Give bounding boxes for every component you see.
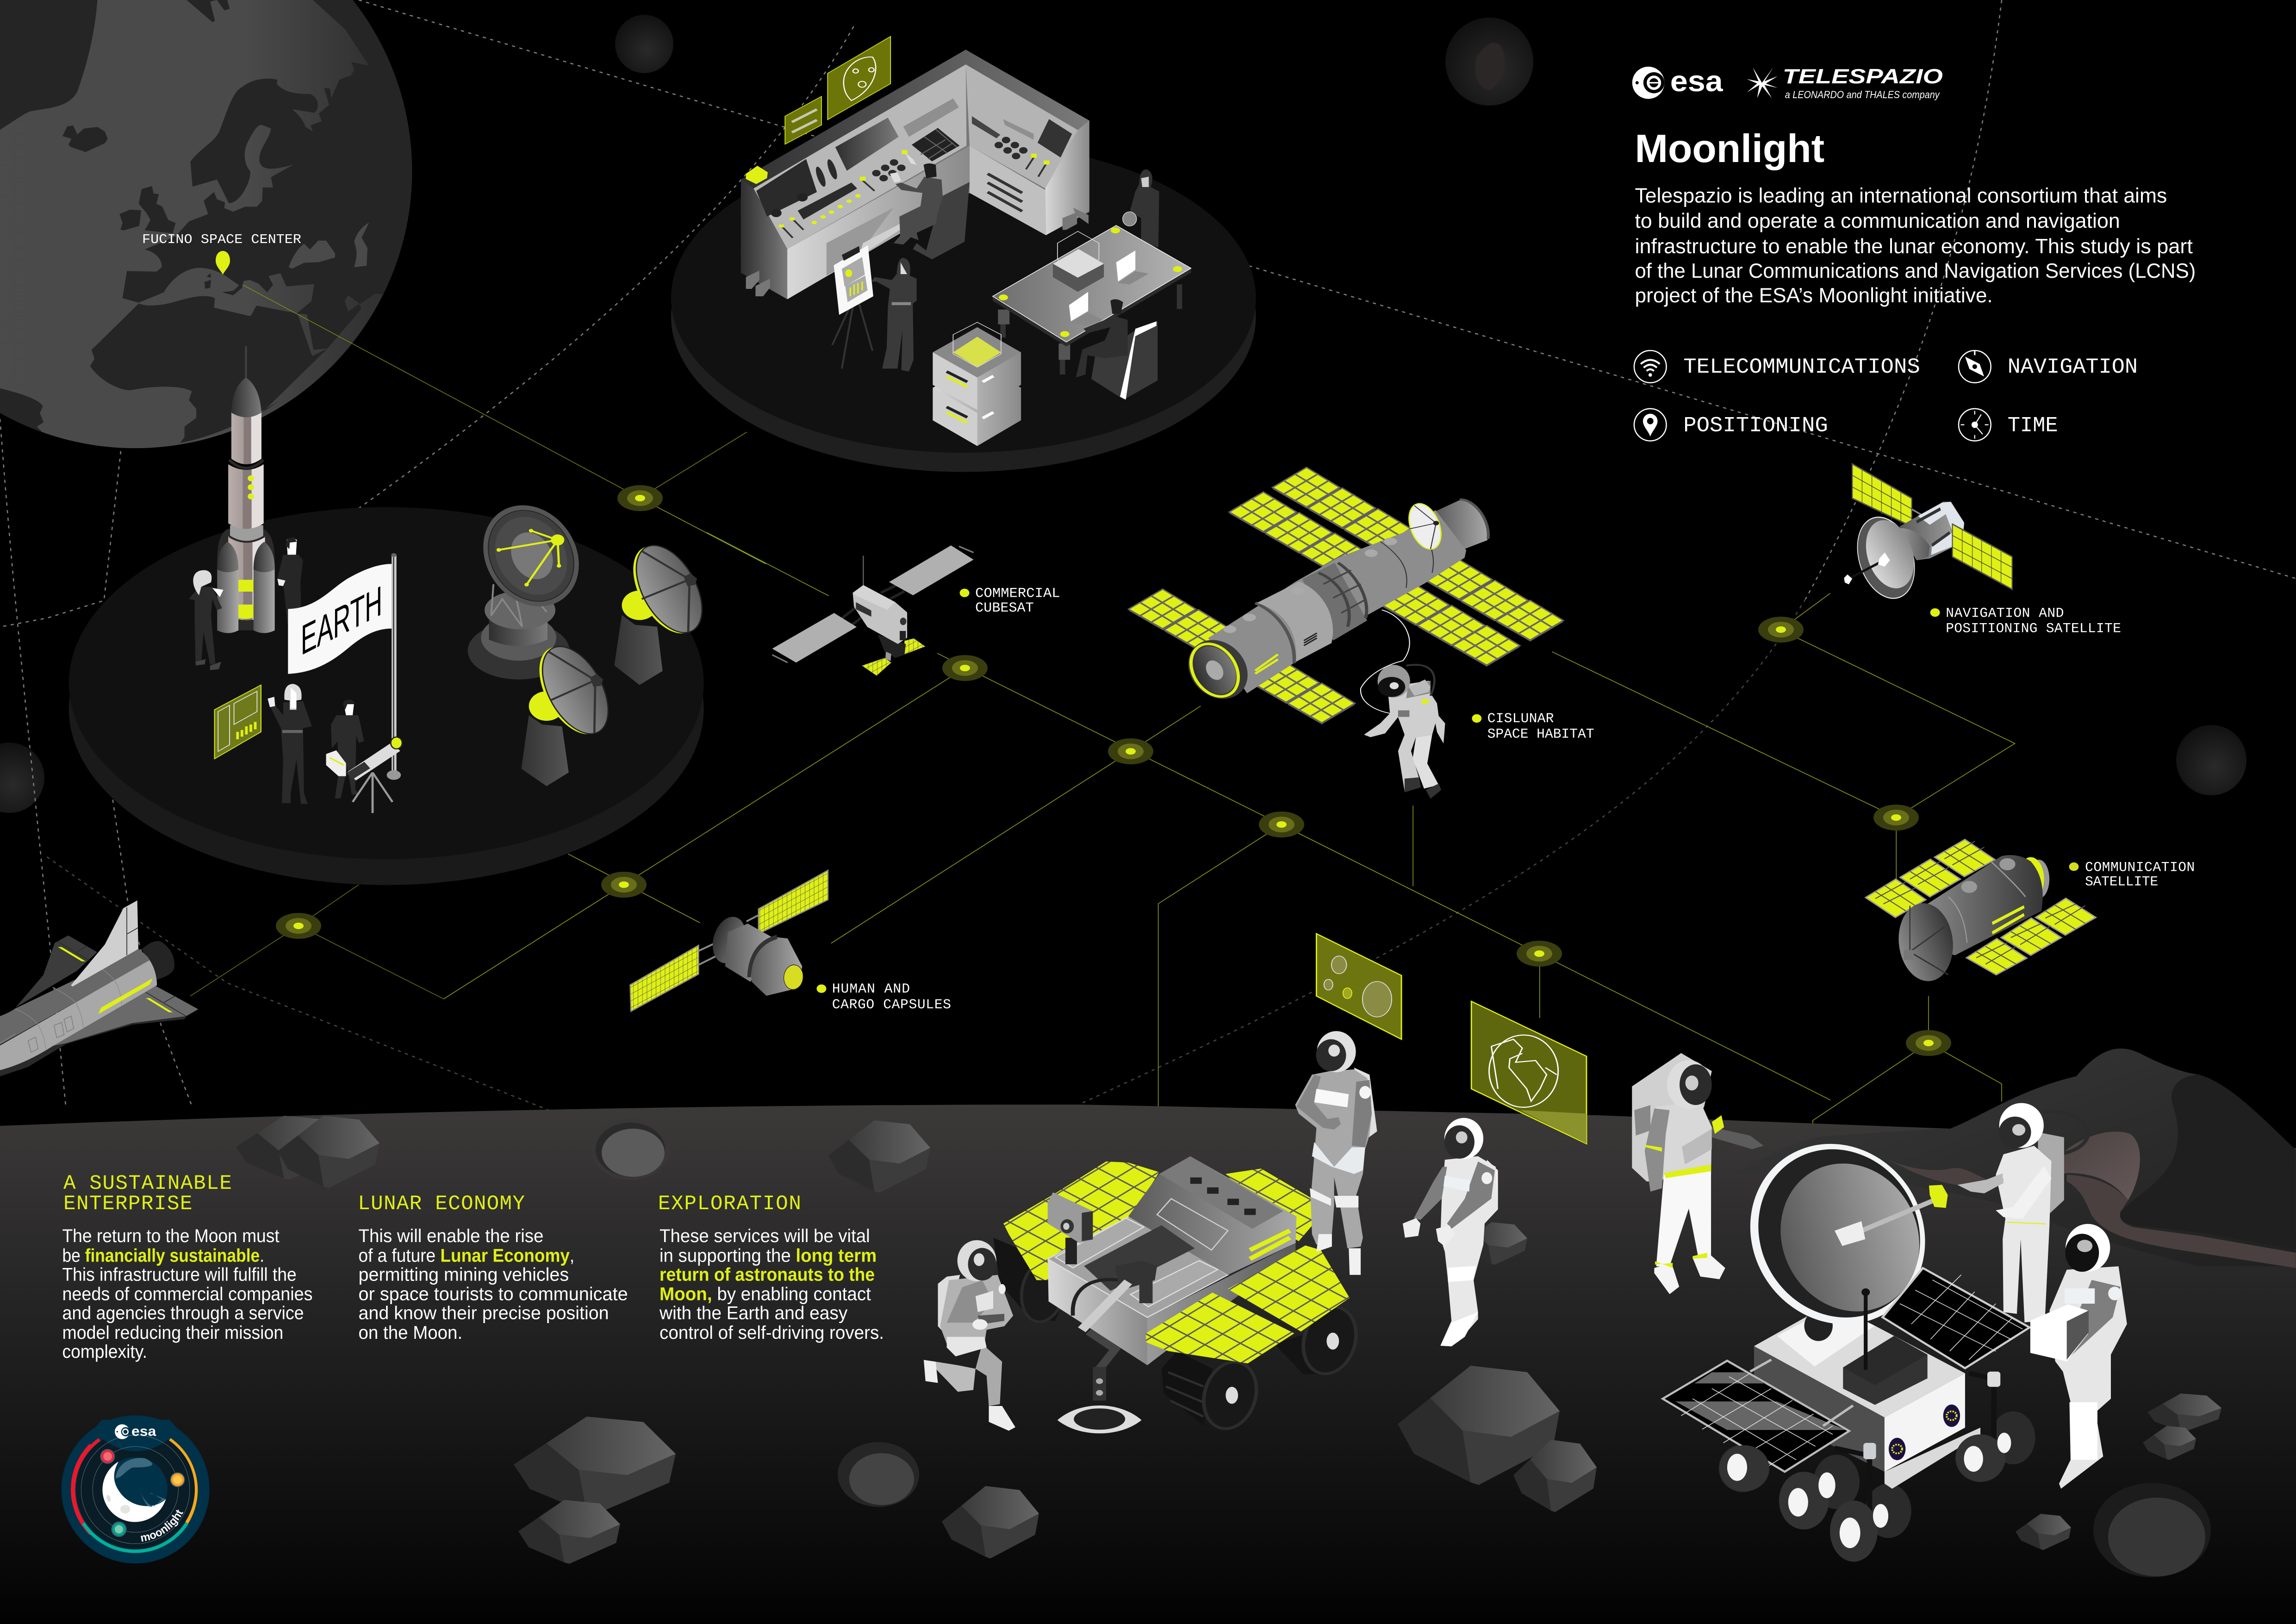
person: seated man with chair xyxy=(1076,299,1157,400)
column: a sustainable enterprise: model reducing their mission xyxy=(62,1323,283,1343)
column: a sustainable enterprise: This infrastructure will fulfill the xyxy=(62,1265,297,1285)
panel: holographic display xyxy=(215,685,261,759)
column: exploration: in supporting the long term xyxy=(660,1246,877,1266)
header logos xyxy=(62,65,2196,1362)
column: exploration: EXPLORATION xyxy=(658,1193,801,1216)
screen: earth globe xyxy=(1471,1001,1587,1144)
screen: craters xyxy=(1316,934,1401,1039)
label: communication satellite xyxy=(2069,859,2195,890)
rover: drilling rover xyxy=(993,1156,1363,1433)
title: Moonlight xyxy=(1635,127,1824,171)
person: woman with notes xyxy=(189,570,224,670)
label: commercial cubesat: COMMERCIAL xyxy=(975,585,1060,601)
spacecraft: navigation and positioning satellite xyxy=(1844,464,2012,613)
label: human and cargo capsules xyxy=(817,981,951,1012)
column: a sustainable enterprise: complexity. xyxy=(62,1342,147,1362)
service: positioning: POSITIONING xyxy=(1683,413,1828,437)
label: navigation and positioning satellite: POSITIONING SATELLITE xyxy=(1946,621,2121,637)
label: cislunar space habitat: CISLUNAR xyxy=(1487,711,1554,726)
mission badge: moonlight xyxy=(139,1508,186,1544)
person: woman presenter xyxy=(268,684,312,804)
column: a sustainable enterprise: be financially sustainable. xyxy=(62,1246,264,1266)
service: telecommunications xyxy=(1634,350,1920,383)
platform: mission control xyxy=(671,37,1256,472)
intro paragraph: to build and operate a communication and navigation xyxy=(1635,210,2120,232)
column: exploration: return of astronauts to the xyxy=(660,1265,875,1285)
intro paragraph: project of the ESA’s Moonlight initiative. xyxy=(1635,284,1993,307)
column: lunar economy: of a future Lunar Economy, xyxy=(359,1246,574,1266)
earth label and pin xyxy=(142,232,301,275)
label: cislunar space habitat: SPACE HABITAT xyxy=(1487,726,1594,742)
dish antenna right xyxy=(614,537,716,685)
service: navigation: NAVIGATION xyxy=(2008,355,2138,379)
label: human and cargo capsules: CARGO CAPSULES xyxy=(832,997,951,1012)
label: cislunar space habitat xyxy=(1472,711,1594,742)
column: lunar economy: on the Moon. xyxy=(359,1323,462,1343)
astronaut: standing with tablet xyxy=(1295,1031,1377,1275)
label: human and cargo capsules: HUMAN AND xyxy=(832,981,910,997)
intro paragraph: infrastructure to enable the lunar economy. This study is part xyxy=(1635,235,2193,258)
platform: earth ground segment xyxy=(69,346,716,885)
column: lunar economy: permitting mining vehicles xyxy=(359,1265,569,1285)
column: lunar economy: LUNAR ECONOMY xyxy=(358,1193,525,1216)
label: navigation and positioning satellite: NAVIGATION AND xyxy=(1946,606,2064,621)
network connection lines xyxy=(190,285,2015,1145)
column: a sustainable enterprise: and agencies through a service xyxy=(62,1303,304,1324)
astronaut: carrying box xyxy=(2030,1224,2127,1489)
column: lunar economy: This will enable the rise xyxy=(359,1226,543,1246)
rocks on moon surface xyxy=(236,1116,2221,1564)
intro paragraph: of the Lunar Communications and Navigation Services (LCNS) xyxy=(1635,260,2196,282)
label: navigation and positioning satellite xyxy=(1930,606,2121,637)
spacecraft: human and cargo capsule xyxy=(630,870,828,1012)
earth label and pin: FUCINO SPACE CENTER xyxy=(142,232,301,247)
label: commercial cubesat xyxy=(960,585,1060,616)
column: exploration: control of self-driving rovers. xyxy=(660,1323,884,1343)
person: console operator xyxy=(890,153,970,259)
column: exploration: These services will be vital xyxy=(660,1226,870,1246)
logo: esa xyxy=(1632,65,1724,99)
column: exploration: Moon, by enabling contact xyxy=(660,1284,871,1305)
dark planets xyxy=(0,15,2246,813)
control console xyxy=(741,50,1089,299)
label: communication satellite: COMMUNICATION xyxy=(2085,859,2195,875)
logo: esa: esa xyxy=(1670,65,1724,98)
big radar dish xyxy=(468,495,594,680)
server racks xyxy=(933,322,1021,446)
telescope xyxy=(349,737,402,813)
column: exploration xyxy=(658,1193,884,1343)
column: a sustainable enterprise: ENTERPRISE xyxy=(63,1193,192,1216)
dish antenna lower xyxy=(521,639,622,786)
dotted orbit arcs xyxy=(0,0,2296,1113)
person: man by rocket xyxy=(277,537,303,624)
flag: earth xyxy=(288,553,401,780)
intro paragraph: Telespazio is leading an international consortium that aims xyxy=(1635,185,2167,207)
earth globe xyxy=(0,0,443,449)
mountain on the moon horizon xyxy=(1733,1049,2296,1268)
person: presenter woman xyxy=(871,258,917,372)
space shuttle xyxy=(0,900,198,1076)
column: exploration: with the Earth and easy xyxy=(659,1303,847,1324)
logo: telespazio xyxy=(1747,65,1943,100)
spacecraft: commercial cubesat xyxy=(772,545,974,675)
service: positioning xyxy=(1634,409,1828,441)
column: lunar economy xyxy=(358,1193,628,1343)
person: woman holding globe xyxy=(1123,169,1159,248)
moon surface ground xyxy=(0,1105,2296,1624)
craters xyxy=(591,1119,2211,1577)
mission badge xyxy=(46,1400,224,1579)
column: a sustainable enterprise xyxy=(62,1172,312,1362)
column: a sustainable enterprise: The return to the Moon must xyxy=(62,1226,280,1246)
astronaut: white suit standing xyxy=(1403,1118,1498,1346)
service: time: TIME xyxy=(2008,413,2058,437)
astronaut: spacewalker xyxy=(1364,665,1445,799)
column: a sustainable enterprise: A SUSTAINABLE xyxy=(63,1172,232,1195)
easel board xyxy=(832,245,873,369)
column: lunar economy: or space tourists to communicate xyxy=(359,1284,628,1305)
intro paragraph xyxy=(1635,185,2196,307)
label: commercial cubesat: CUBESAT xyxy=(975,600,1034,616)
ground station node markers xyxy=(276,485,1951,1056)
rocket xyxy=(217,346,275,633)
astronaut: pointing at feed xyxy=(1957,1103,2088,1322)
label: communication satellite: SATELLITE xyxy=(2085,874,2158,890)
astronaut: with backpack left xyxy=(1632,1053,1764,1294)
mission badge: esa xyxy=(131,1424,156,1439)
logo: telespazio: a LEONARDO and THALES company xyxy=(1785,89,1940,100)
holographic screens xyxy=(785,37,890,144)
service: navigation xyxy=(1959,350,2138,383)
spacecraft: cislunar space habitat xyxy=(1129,468,1563,725)
logo: telespazio: TELESPAZIO xyxy=(1783,65,1943,88)
person: man with briefcase xyxy=(326,700,364,798)
column: a sustainable enterprise: needs of commercial companies xyxy=(62,1284,312,1305)
meeting table xyxy=(993,225,1191,375)
flag label EARTH: EARTH xyxy=(301,576,382,665)
service: telecommunications: TELECOMMUNICATIONS xyxy=(1683,355,1920,379)
astronaut: kneeling xyxy=(924,1240,1015,1431)
column: lunar economy: and know their precise position xyxy=(359,1303,609,1324)
rover: communications dish rover xyxy=(1663,1127,2035,1562)
service: time xyxy=(1959,409,2058,441)
spacecraft: communication satellite xyxy=(1866,839,2096,993)
